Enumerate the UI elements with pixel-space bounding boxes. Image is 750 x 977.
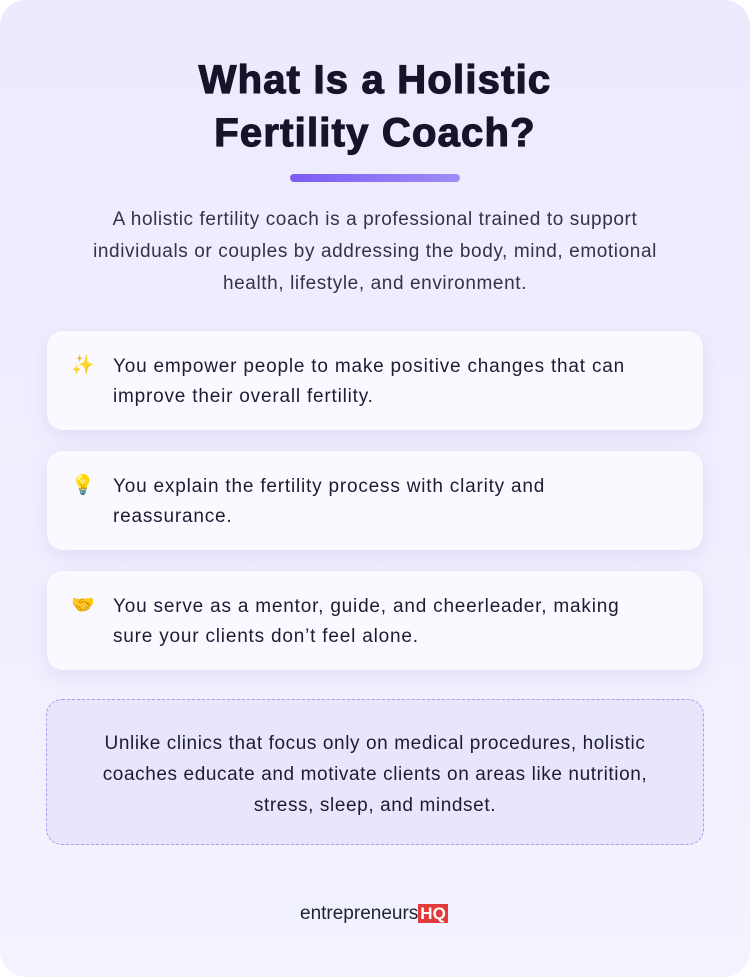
intro text: A holistic fertility coach is a professional trained to support individuals or couples by addressing the body, mind, emotional health, lifestyle, and environment.	[93, 209, 657, 294]
callout note	[46, 699, 704, 845]
title: What Is a Holistic	[199, 58, 551, 102]
card text: You serve as a mentor, guide, and cheerleader, making sure your clients don’t feel alone.	[113, 596, 619, 647]
card text: You explain the fertility process with clarity and	[113, 476, 545, 497]
title: Fertility Coach?	[214, 111, 536, 155]
icon: handshake: 🤝	[71, 594, 95, 616]
card text: You empower people to make positive changes that can improve their overall fertility.	[113, 356, 625, 407]
card text	[113, 476, 545, 527]
card: explain	[47, 451, 703, 550]
icon: sparkles: ✨	[71, 354, 95, 376]
card text: reassurance.	[113, 506, 232, 527]
accent bar	[290, 174, 460, 182]
callout note: Unlike clinics that focus only on medical procedures, holistic coaches educate and motivate clients on areas like nutrition, stress, sleep, and mindset.	[103, 733, 647, 816]
logo: entrepreneursHQ	[300, 903, 446, 924]
card: empower	[47, 331, 703, 430]
icon: light bulb: 💡	[71, 474, 95, 496]
card: mentor	[47, 571, 703, 670]
title	[198, 58, 551, 156]
